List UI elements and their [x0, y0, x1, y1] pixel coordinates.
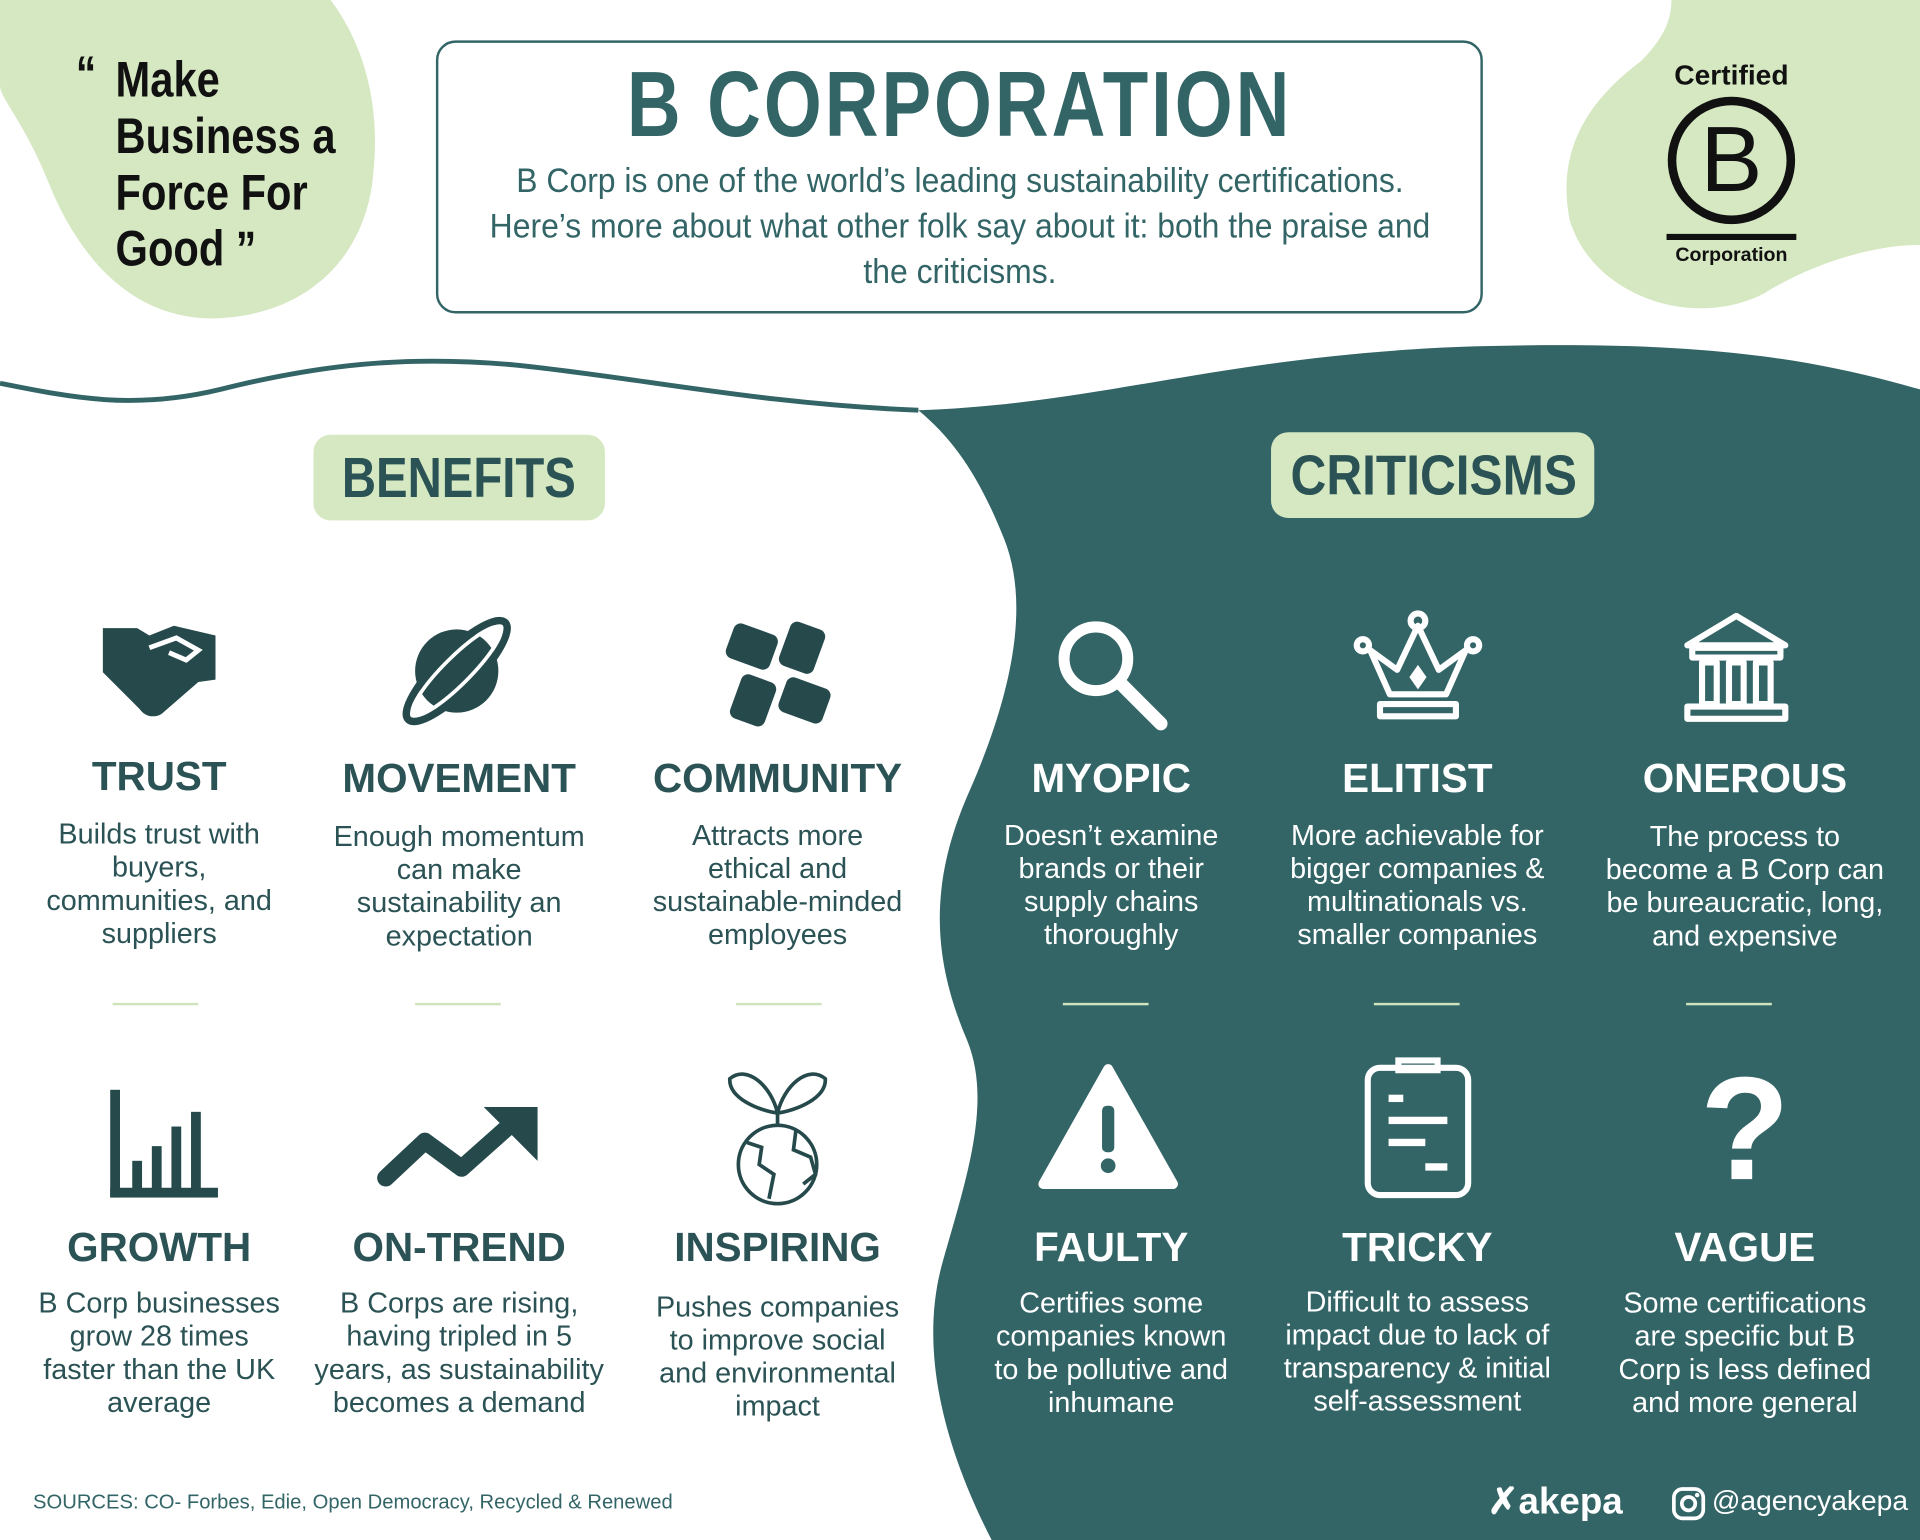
criticism: tricky: TRICKY — [1342, 1224, 1493, 1270]
benefit: trust: TRUST — [92, 753, 227, 798]
criticism: onerous: and expensive — [1652, 920, 1838, 951]
benefit: community: employees — [708, 918, 847, 950]
criticism: elitist — [1290, 610, 1545, 950]
benefit: community: COMMUNITY — [653, 756, 902, 801]
benefit: movement: Enough momentum — [334, 820, 585, 852]
benefit: community: ethical and — [708, 852, 847, 884]
benefit: community: sustainable-minded — [653, 885, 902, 917]
benefit: community: Attracts more — [692, 819, 863, 851]
criticism: vague: Some certifications — [1623, 1287, 1866, 1319]
benefit: growth: B Corp businesses — [38, 1287, 280, 1319]
logo: B corp: Corporation — [1675, 245, 1787, 266]
benefit: inspiring: INSPIRING — [674, 1224, 881, 1270]
criticism: faulty — [994, 1064, 1228, 1418]
benefit: growth: average — [107, 1386, 211, 1418]
benefit: inspiring: Pushes companies — [656, 1291, 899, 1322]
criticism: faulty: FAULTY — [1034, 1224, 1188, 1270]
criticism: vague: ? — [1700, 1047, 1790, 1211]
criticisms heading — [1271, 432, 1594, 518]
criticism: tricky — [1284, 1057, 1551, 1417]
benefit: inspiring: to improve social — [670, 1324, 885, 1356]
benefit: trust — [46, 626, 272, 949]
footer brand: ✗akepa — [1488, 1482, 1623, 1522]
quote: Business a — [116, 108, 336, 164]
criticism: myopic: supply chains — [1024, 885, 1198, 917]
criticism: myopic: brands or their — [1018, 852, 1204, 884]
criticism: faulty: companies known — [996, 1320, 1226, 1352]
benefit: on-trend — [314, 1107, 604, 1418]
criticisms heading: CRITICISMS — [1291, 443, 1577, 507]
benefit: growth — [38, 1090, 280, 1418]
benefit: growth: grow 28 times — [70, 1320, 249, 1352]
criticism: elitist: smaller companies — [1297, 918, 1537, 950]
criticism: vague: Corp is less defined — [1619, 1353, 1871, 1385]
subtitle: the criticisms. — [863, 252, 1056, 290]
criticism: tricky: Difficult to assess — [1306, 1286, 1529, 1318]
criticism: tricky: transparency & initial — [1284, 1352, 1551, 1384]
criticism: tricky: self-assessment — [1313, 1385, 1521, 1417]
benefit: on-trend: becomes a demand — [333, 1386, 586, 1418]
benefit: trust: Builds trust with — [58, 818, 260, 850]
subtitle — [489, 162, 1430, 290]
benefit: on-trend: B Corps are rising, — [340, 1287, 578, 1319]
criticism: elitist: More achievable for — [1291, 819, 1544, 851]
benefit: movement: sustainability an — [357, 887, 562, 918]
benefit: growth: GROWTH — [67, 1224, 251, 1270]
criticism: faulty: to be pollutive and — [994, 1353, 1228, 1385]
quote — [76, 48, 336, 277]
sources: SOURCES: CO- Forbes, Edie, Open Democracy, Recycled & Renewed — [33, 1491, 673, 1513]
benefits heading — [313, 435, 605, 520]
footer brand — [1488, 1482, 1908, 1522]
benefit: movement: expectation — [386, 920, 533, 951]
criticism: elitist: ELITIST — [1342, 756, 1493, 801]
criticism: onerous — [1606, 612, 1884, 952]
logo: B corp: B — [1700, 108, 1762, 212]
subtitle: Here’s more about what other folk say about it: both the praise and — [489, 207, 1430, 245]
benefit: on-trend: having tripled in 5 — [346, 1320, 572, 1352]
criticism: onerous: The process to — [1650, 820, 1840, 852]
quote: Good ” — [116, 220, 256, 277]
title box — [436, 40, 1483, 313]
criticism: elitist: bigger companies & — [1290, 852, 1545, 884]
criticism: elitist: multinationals vs. — [1307, 885, 1528, 917]
benefit: inspiring: impact — [735, 1390, 820, 1422]
criticism: tricky: impact due to lack of — [1285, 1319, 1549, 1351]
quote: “ — [76, 48, 96, 102]
benefit: on-trend: ON-TREND — [353, 1224, 566, 1270]
criticism: vague: and more general — [1632, 1386, 1858, 1418]
logo: B corp: Certified — [1674, 59, 1789, 91]
benefit: movement — [334, 616, 585, 952]
quote: Force For — [116, 164, 308, 220]
benefit: trust: communities, and — [46, 884, 272, 916]
benefit: trust: buyers, — [112, 851, 206, 883]
title: B CORPORATION — [627, 53, 1292, 157]
criticism: myopic — [1004, 621, 1218, 950]
footer brand: @agencyakepa — [1712, 1484, 1908, 1516]
benefit: growth: faster than the UK — [43, 1353, 275, 1385]
benefit: movement: MOVEMENT — [342, 756, 576, 801]
criticism: onerous: ONEROUS — [1643, 756, 1847, 801]
criticism: vague: are specific but B — [1635, 1320, 1855, 1352]
subtitle: B Corp is one of the world’s leading sustainability certifications. — [516, 162, 1403, 200]
criticism: myopic: thoroughly — [1044, 918, 1178, 950]
quote: Make — [116, 51, 220, 108]
logo: B corp — [1666, 59, 1796, 266]
criticism: faulty: Certifies some — [1019, 1287, 1203, 1319]
benefit: community — [653, 622, 902, 950]
benefit: inspiring — [656, 1072, 899, 1422]
benefit: inspiring: and environmental — [659, 1357, 896, 1389]
benefit: on-trend: years, as sustainability — [314, 1353, 604, 1385]
benefit: trust: suppliers — [102, 917, 217, 949]
criticism: vague: VAGUE — [1675, 1224, 1815, 1270]
benefit: movement: can make — [397, 853, 522, 885]
criticism: onerous: be bureaucratic, long, — [1607, 887, 1883, 918]
criticism: faulty: inhumane — [1048, 1386, 1174, 1418]
criticism: myopic: Doesn’t examine — [1004, 819, 1218, 851]
criticism: myopic: MYOPIC — [1032, 756, 1191, 801]
criticism: vague — [1619, 1047, 1871, 1418]
benefits heading: BENEFITS — [342, 446, 576, 509]
criticism: onerous: become a B Corp can — [1606, 853, 1884, 885]
